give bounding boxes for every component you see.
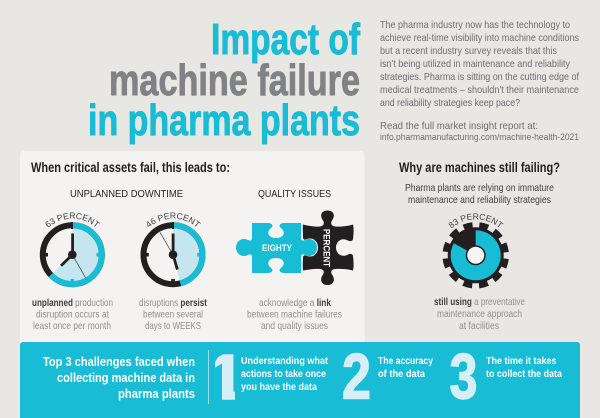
caption: quality issues: [247, 297, 342, 332]
intro text block: The pharma industry now has the technology to: [380, 19, 570, 31]
report link: info.pharmamanufacturing.com/machine-health-2021: [380, 132, 579, 143]
challenge 1: you have the data: [241, 381, 317, 393]
quality issues heading: QUALITY ISSUES: [258, 188, 331, 200]
caption: clock 46 percent: days to WEEKS: [145, 320, 201, 332]
challenge 1: 1: [206, 341, 246, 413]
icon: puzzle pieces: EIGHTY: [262, 243, 293, 254]
caption: gear: still using a preventative: [434, 296, 525, 308]
intro text block: [380, 19, 579, 109]
challenge 2: of the data: [378, 368, 425, 380]
caption: gear: [434, 296, 525, 332]
challenge 3: 3: [450, 340, 478, 412]
challenge 3: The time it takes: [486, 355, 557, 367]
caption: gear: maintenance approach: [437, 308, 522, 320]
challenge 2: The accuracy: [378, 355, 433, 367]
challenge 3: to collect the data: [486, 368, 562, 380]
title: machine failure: [109, 56, 360, 105]
intro text block: and reliability strategies keep pace?: [380, 97, 520, 109]
caption: clock 63 percent: least once per month: [33, 320, 111, 332]
challenge 2: [342, 340, 433, 412]
caption: clock 63 percent: unplanned production: [32, 297, 113, 309]
unplanned downtime heading: UNPLANNED DOWNTIME: [70, 188, 183, 200]
caption: clock 63 percent: disruption occurs at: [36, 308, 109, 320]
caption: clock 63 percent: [32, 297, 113, 332]
challenge 3: [450, 340, 562, 412]
challenges heading: Top 3 challenges faced when: [43, 355, 195, 369]
icon: puzzle pieces: [236, 210, 354, 285]
panel: critical assets: [20, 151, 364, 351]
clock: 46 percent: [140, 212, 206, 288]
caption: quality issues: acknowledge a link: [259, 297, 331, 309]
challenge 2: 2: [342, 340, 371, 412]
challenges heading: pharma plants: [118, 387, 195, 401]
panel: top 3 challenges: [20, 340, 580, 418]
title: [88, 15, 360, 145]
caption: clock 46 percent: disruptions persist: [139, 297, 207, 309]
icon: gear 83 percent: 83 PERCENT: [448, 214, 504, 228]
report link: [380, 120, 579, 143]
icon: gear 83 percent: [442, 214, 509, 288]
challenge 1: [215, 354, 328, 400]
title: Impact of: [211, 15, 360, 64]
panel heading: When critical assets fail, this leads to:: [31, 160, 230, 175]
intro text block: but a recent industry survey reveals that this: [380, 45, 557, 57]
clock: 46 percent: 46 PERCENT: [147, 212, 201, 227]
caption: clock 46 percent: [139, 297, 207, 332]
challenges heading: [43, 355, 195, 401]
caption: quality issues: between machine failures: [247, 308, 342, 320]
why subheading: Pharma plants are relying on immature: [405, 182, 554, 194]
intro text block: isn't being utilized in maintenance and reliability: [380, 58, 571, 70]
caption: gear: at facilities: [459, 320, 499, 332]
challenge 1: Understanding what: [241, 355, 328, 367]
why subheading: [405, 182, 554, 206]
why heading: Why are machines still failing?: [399, 160, 560, 175]
why subheading: maintenance and reliability strategies: [408, 194, 551, 206]
report link: Read the full market insight report at:: [380, 120, 538, 132]
caption: clock 46 percent: between several: [143, 308, 203, 320]
challenge 1: actions to take once: [241, 368, 326, 380]
caption: quality issues: and quality issues: [261, 320, 328, 332]
title: in pharma plants: [88, 96, 360, 145]
icon: puzzle pieces: PERCENT: [321, 229, 332, 267]
challenges heading: collecting machine data in: [57, 371, 195, 385]
clock: 63 percent: 63 PERCENT: [46, 212, 100, 227]
clock: 63 percent: [40, 212, 105, 288]
